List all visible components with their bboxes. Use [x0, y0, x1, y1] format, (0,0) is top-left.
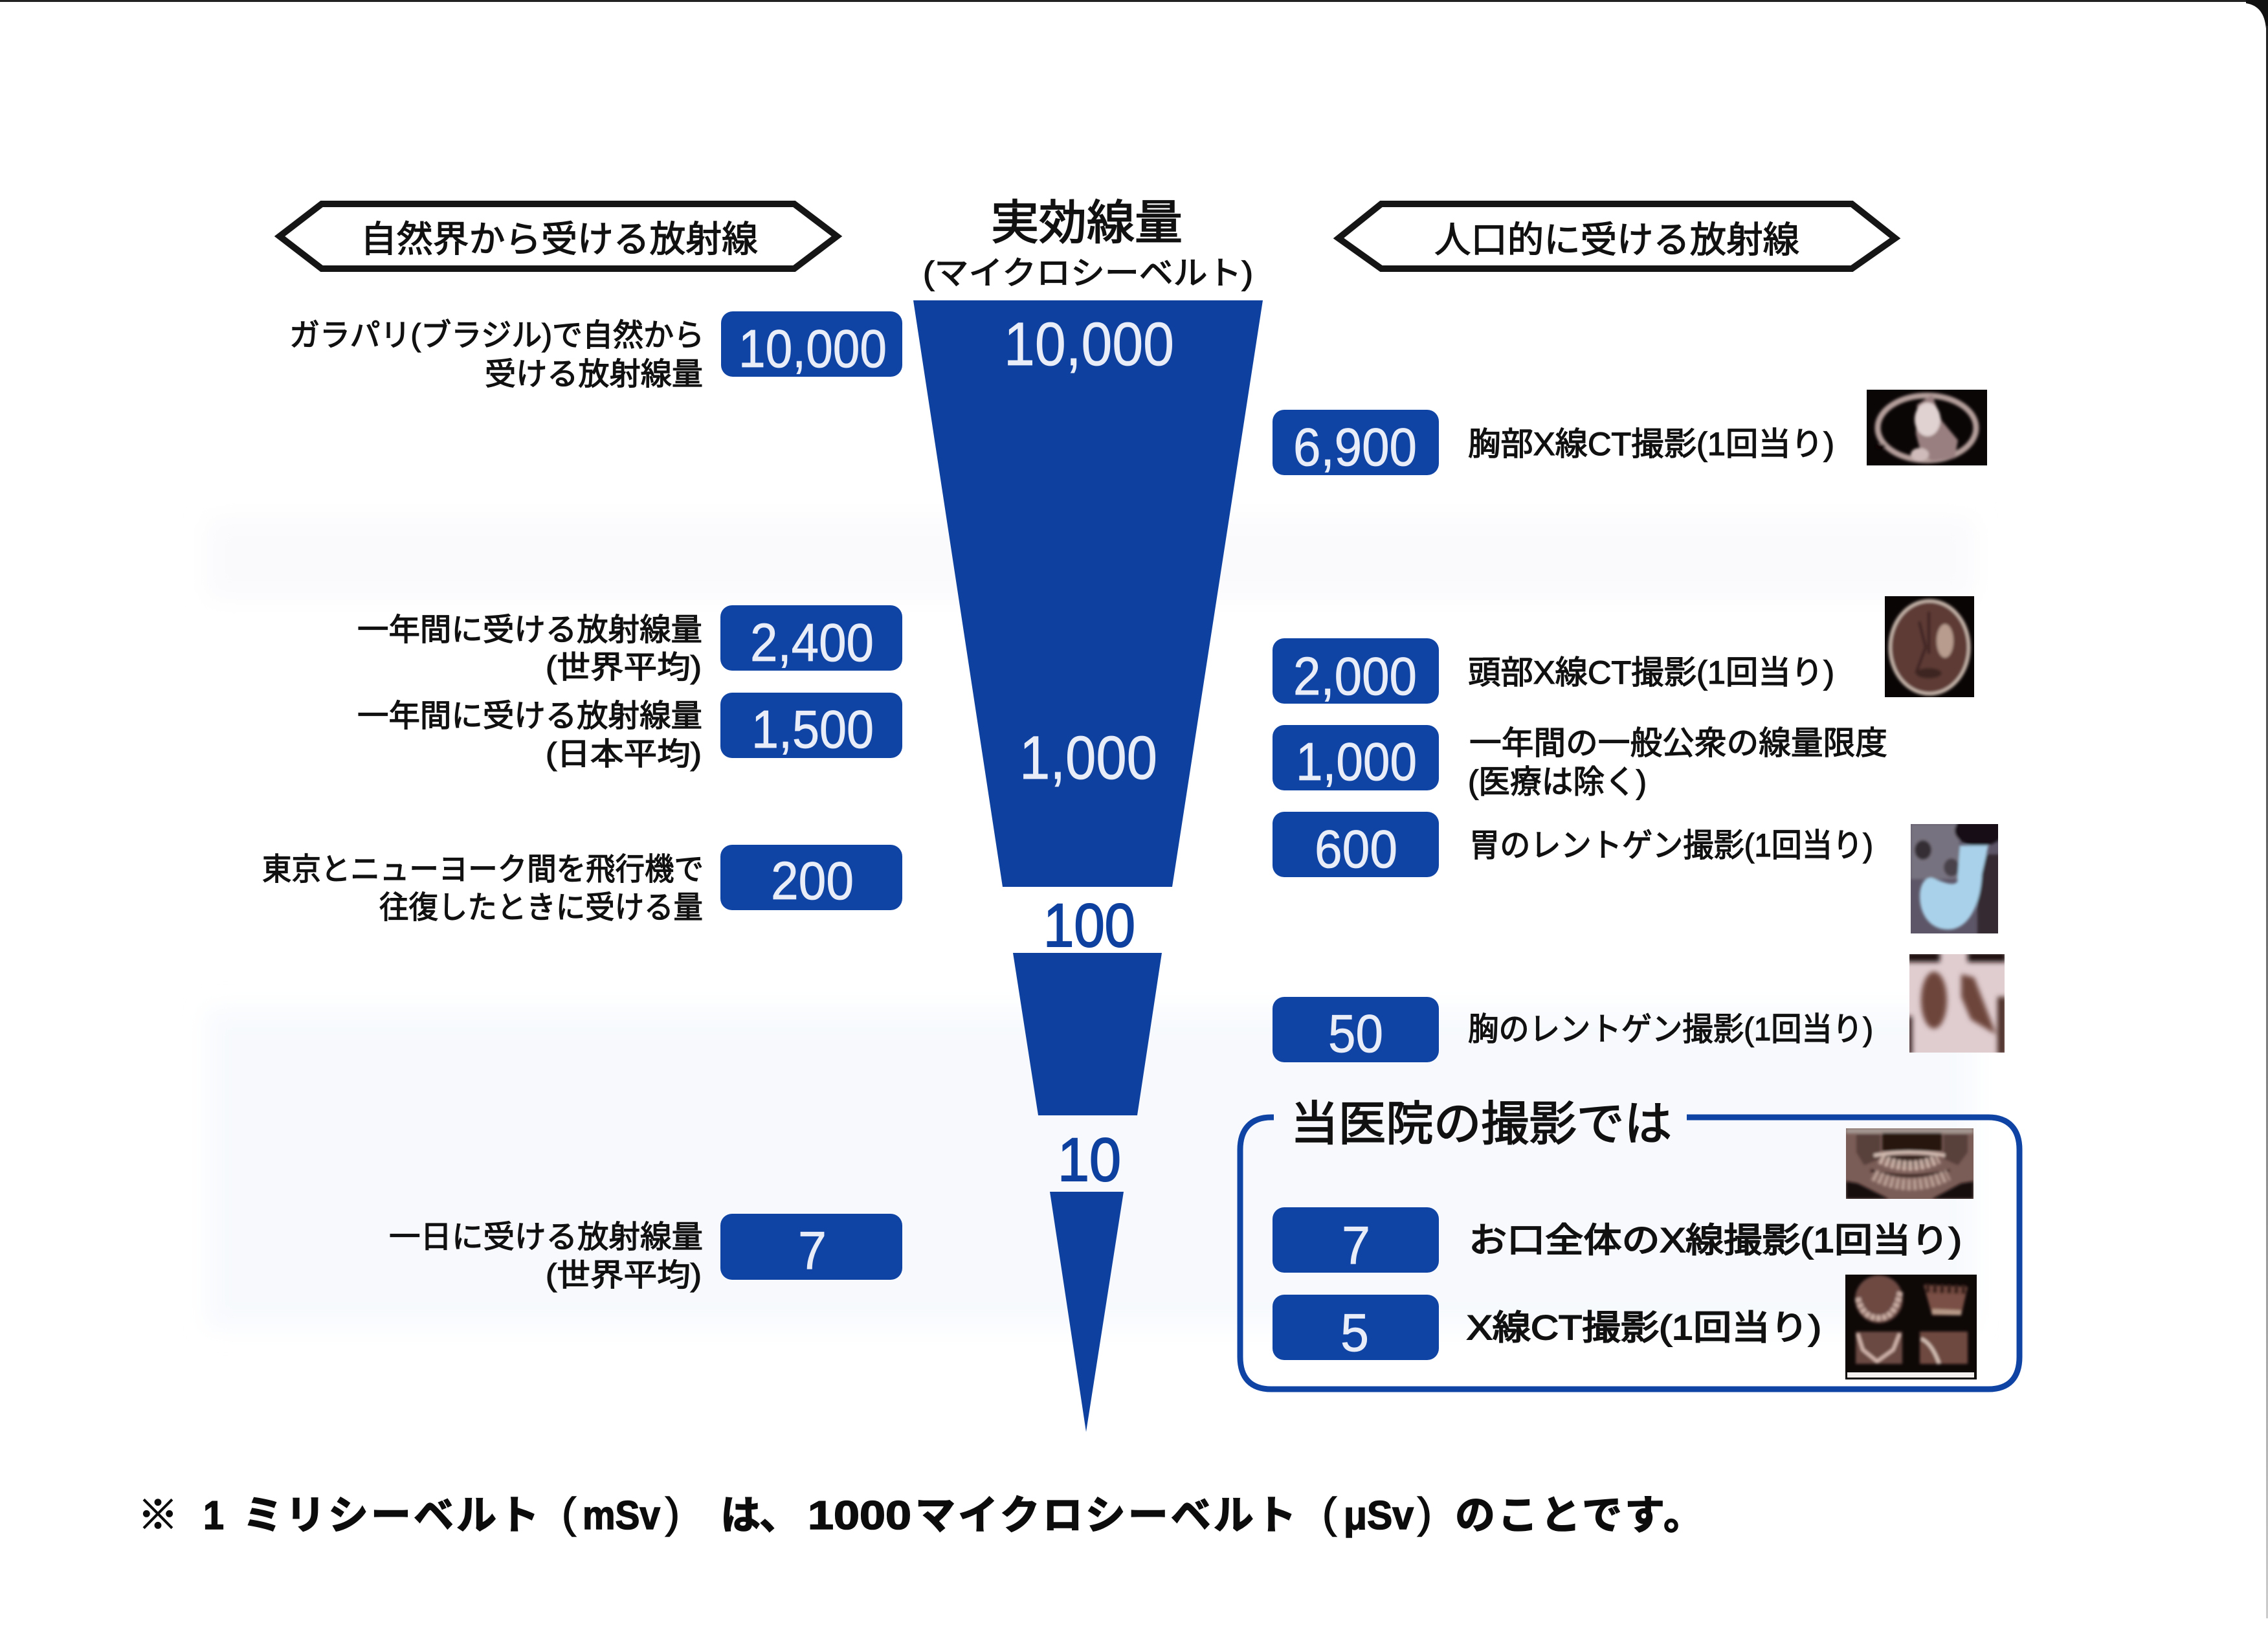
- item: Guarapari: [289, 311, 902, 392]
- value: 2,000: [1293, 646, 1417, 706]
- item: head CT: [1273, 596, 1974, 706]
- label: 一年間の一般公衆の線量限度: [1469, 725, 1887, 761]
- footnote: close paren: ): [665, 1489, 680, 1537]
- panel title: 当医院の撮影では: [1291, 1098, 1672, 1150]
- pill: [1273, 638, 1439, 704]
- footnote: microSv: μSv: [1344, 1493, 1414, 1538]
- value: 1,500: [751, 699, 874, 759]
- label: お口全体のX線撮影(1回当り): [1469, 1222, 1962, 1260]
- label: 一年間に受ける放射線量: [357, 613, 702, 647]
- value: 2,400: [750, 612, 874, 673]
- footnote: open paren 2: (: [1322, 1489, 1337, 1537]
- heading main: 実効線量: [991, 197, 1183, 249]
- hexagon frame right: [1339, 204, 1895, 269]
- footnote: particle: は、: [720, 1493, 798, 1538]
- pill: [720, 605, 902, 671]
- footnote: 1000: 1000: [808, 1493, 911, 1538]
- pill: [1273, 410, 1439, 475]
- value: 50: [1328, 1003, 1383, 1064]
- value: 600: [1315, 819, 1397, 879]
- item: stomach X-ray: [1273, 812, 2004, 935]
- label: 往復したときに受ける量: [379, 891, 703, 925]
- heading text right: 人口的に受ける放射線: [1434, 219, 1799, 260]
- panel: this clinic's imaging: [1240, 1098, 2019, 1389]
- label: 胸部X線CT撮影(1回当り): [1468, 426, 1834, 462]
- footnote: open paren: (: [562, 1489, 576, 1537]
- heading text left: 自然界から受ける放射線: [361, 219, 758, 260]
- photo: stomach X-ray: [1911, 824, 1998, 933]
- pill: [720, 1214, 902, 1280]
- value: 6,900: [1293, 417, 1417, 477]
- item: chest CT: [1273, 390, 1987, 477]
- pill: [1273, 725, 1439, 790]
- pill: [721, 311, 902, 377]
- label: 胃のレントゲン撮影(1回当り): [1469, 827, 1873, 864]
- value: 1,000: [1296, 731, 1417, 792]
- footnote: ending: のことです。: [1455, 1493, 1706, 1538]
- heading: artificial radiation: [1339, 204, 1895, 269]
- photo: chest X-ray: [1906, 952, 2007, 1055]
- pill: [1273, 997, 1439, 1062]
- scale value 10,000: 10,000: [1004, 310, 1174, 379]
- photo: panoramic dental X-ray: [1846, 1128, 1973, 1199]
- footnote: millisievert word: ミリシーベルト: [243, 1493, 542, 1538]
- label: (世界平均): [546, 1258, 702, 1293]
- item: Tokyo New York flight: [262, 845, 902, 925]
- panel frame: [1240, 1117, 2019, 1389]
- value: 7: [1342, 1215, 1370, 1275]
- item: panoramic: [1273, 1207, 1962, 1275]
- pill: [1273, 1207, 1439, 1273]
- heading: effective dose: [923, 197, 1253, 291]
- pill: [1273, 1295, 1439, 1360]
- funnel section: 100 to 10: [1013, 953, 1162, 1115]
- item: world daily average: [389, 1214, 902, 1293]
- label: (日本平均): [546, 737, 702, 772]
- photo: chest CT: [1867, 390, 1987, 465]
- footnote: one: 1: [203, 1493, 224, 1538]
- photo: dental CT: [1845, 1275, 1977, 1379]
- scale value 1,000: 1,000: [1019, 724, 1157, 792]
- funnel: effective dose scale: [913, 300, 1263, 1432]
- photo: head CT: [1885, 596, 1974, 697]
- heading: natural radiation: [280, 204, 837, 269]
- label: ガラパリ(ブラジル)で自然から: [289, 318, 704, 353]
- item: chest X-ray: [1273, 952, 2007, 1064]
- footnote: reference mark: ※: [138, 1493, 178, 1538]
- heading unit: (マイクロシーベルト): [923, 255, 1253, 291]
- value: 5: [1340, 1302, 1369, 1363]
- scale value 10: 10: [1058, 1126, 1121, 1194]
- pill: [1273, 812, 1439, 877]
- footnote: [138, 1489, 1706, 1538]
- pill: [720, 845, 902, 910]
- footnote: microsievert word: マイクロシーベルト: [915, 1493, 1299, 1538]
- item: world annual average: [357, 605, 902, 685]
- label: 一年間に受ける放射線量: [357, 699, 702, 733]
- label: 東京とニューヨーク間を飛行機で: [262, 853, 704, 887]
- item: annual public limit: [1273, 725, 1887, 800]
- value: 7: [798, 1220, 827, 1280]
- label: X線CT撮影(1回当り): [1467, 1309, 1821, 1347]
- funnel section: 10,000 to 1,000: [913, 300, 1263, 887]
- label: 受ける放射線量: [485, 357, 703, 392]
- footnote: close paren 2: ): [1418, 1489, 1432, 1537]
- label: 胸のレントゲン撮影(1回当り): [1468, 1011, 1873, 1047]
- footnote: mSv: mSv: [583, 1493, 660, 1538]
- label: (医療は除く): [1468, 764, 1647, 800]
- label: 一日に受ける放射線量: [389, 1220, 703, 1255]
- value: 200: [771, 851, 854, 911]
- right column: artificial radiation items: [1273, 390, 2007, 1064]
- left column: natural radiation items: [262, 311, 902, 1293]
- label: (世界平均): [546, 651, 702, 685]
- value: 10,000: [739, 318, 887, 379]
- funnel section: below 10: [1050, 1192, 1124, 1432]
- pill: [720, 693, 902, 758]
- item: Japan annual average: [357, 693, 902, 772]
- hexagon frame left: [280, 204, 837, 269]
- scale value 100: 100: [1043, 891, 1135, 960]
- item: dental CT: [1273, 1295, 1821, 1363]
- label: 頭部X線CT撮影(1回当り): [1468, 654, 1834, 691]
